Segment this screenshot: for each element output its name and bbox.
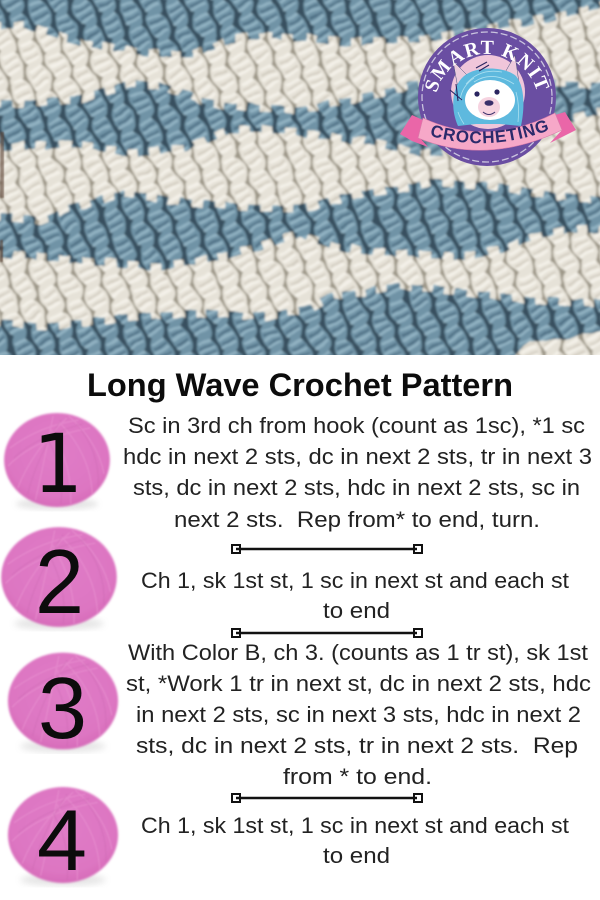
step 4 instructions [141,813,569,868]
yarn ball: step 2 [1,527,117,633]
yarn ball: step 4 [8,787,118,889]
yarn ball: step 1: 1 [33,418,83,512]
divider 2 [232,629,422,637]
step 3 instructions: With Color B, ch 3. (counts as 1 tr st), sk 1st [128,640,588,665]
step 1 instructions: hdc in next 2 sts, dc in next 2 sts, tr in next 3 [123,444,592,469]
logo: inner pink circle [451,55,525,129]
photo: crochet swatch with blue and cream waves [0,0,600,370]
step 4 instructions: to end [323,843,390,868]
logo: arched text SMART KNIT: SMART KNIT [425,40,550,92]
yarn ball: step 4: 4 [37,793,87,889]
logo: ribbon with CROCHETING: CROCHETING [431,120,548,144]
step 1 instructions: Sc in 3rd ch from hook (count as 1sc), *1 sc [128,413,585,438]
step 3 instructions [126,640,591,789]
logo: Smart Knit Crocheting badge [400,28,576,166]
yarn ball: step 3 [8,653,118,757]
step 3 instructions: sts, dc in next 2 sts, tr in next 2 sts. Rep [136,733,578,758]
yarn ball: step 3: 3 [38,660,87,757]
logo: ribbon tails [400,112,576,147]
step 3 instructions: from * to end. [283,764,432,789]
logo: alpaca head [450,55,523,126]
step 4 instructions: Ch 1, sk 1st st, 1 sc in next st and each st [141,813,569,838]
yarn ball: step 1 [4,413,110,512]
divider 3 [232,794,422,802]
step 3 instructions: st, *Work 1 tr in next st, dc in next 2 sts, hdc [126,671,591,696]
divider 1 [232,545,422,553]
step 1 instructions: next 2 sts. Rep from* to end, turn. [174,507,540,532]
step 2 instructions: to end [323,598,390,623]
title: Long Wave Crochet Pattern [87,367,513,403]
step 1 instructions [123,413,592,532]
yarn ball: step 2: 2 [35,532,84,633]
step 2 instructions [141,568,569,623]
step 2 instructions: Ch 1, sk 1st st, 1 sc in next st and each st [141,568,569,593]
step 1 instructions: sts, dc in next 2 sts, hdc in next 2 sts, sc in [133,475,580,500]
step 3 instructions: in next 2 sts, sc in next 3 sts, hdc in next 2 [136,702,581,727]
